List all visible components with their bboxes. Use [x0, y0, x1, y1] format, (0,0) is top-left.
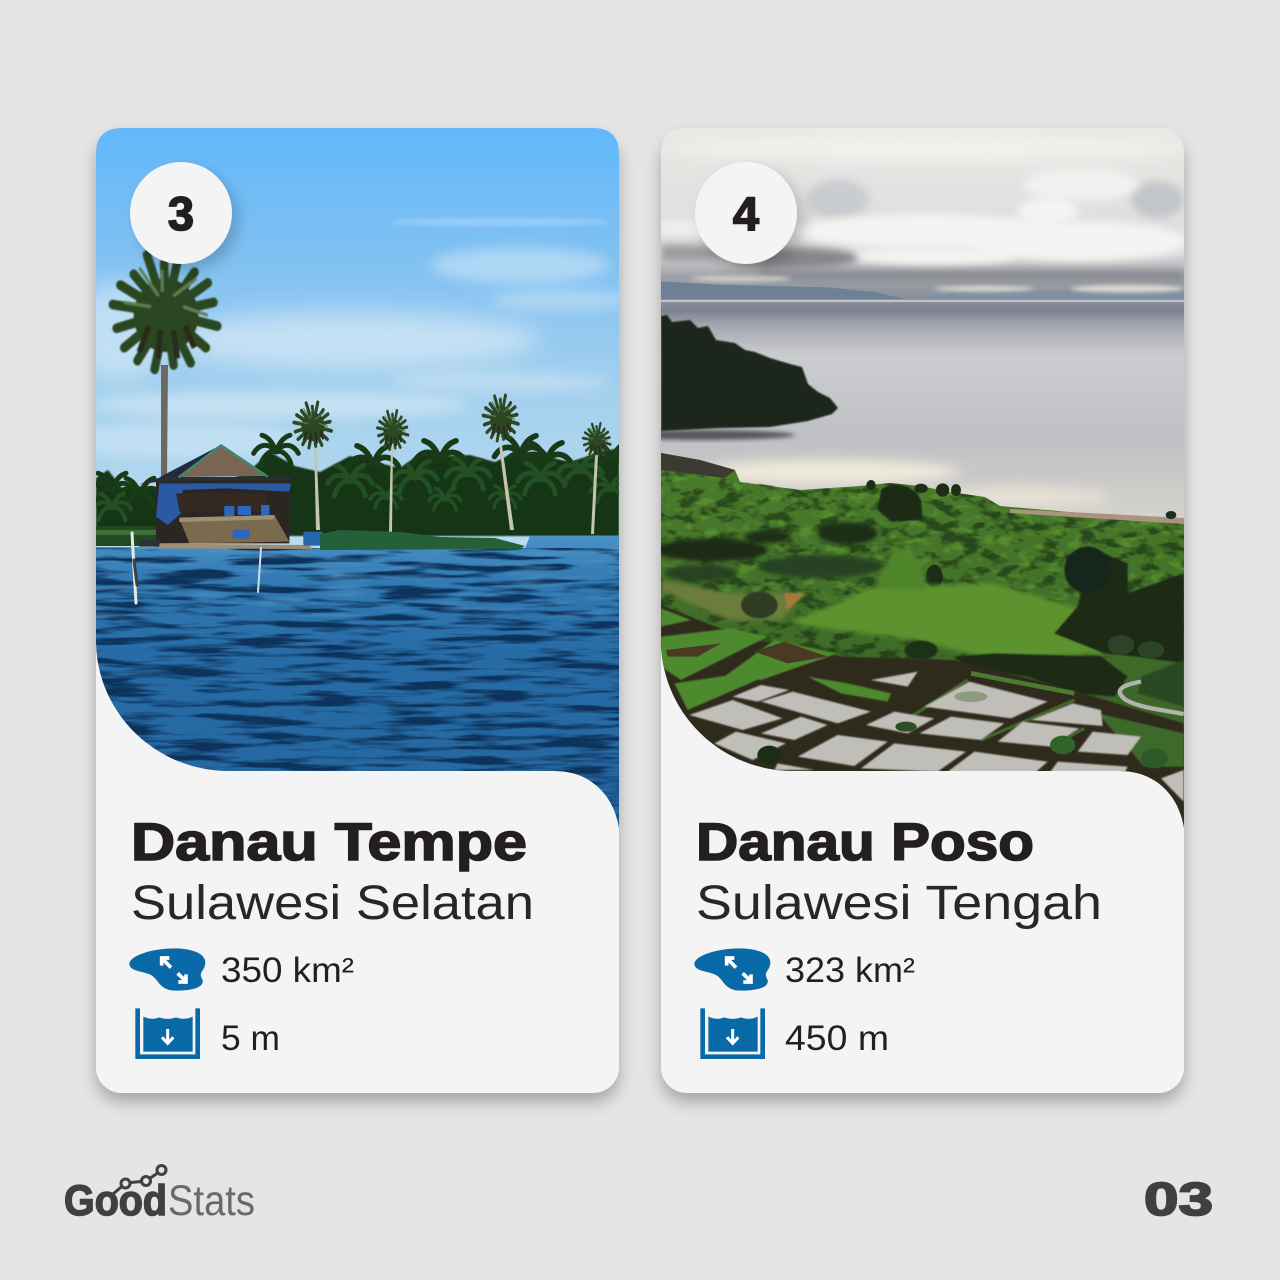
icon: lake depth: [703, 1008, 763, 1057]
card 3 base: [96, 128, 619, 1093]
photo: Danau Tempe: [60, 128, 634, 830]
icon: lake depth: [138, 1008, 198, 1057]
value: depth: 5 m: [221, 1019, 280, 1058]
number badge 4: 4: [733, 187, 759, 240]
water hyacinth island: [320, 530, 525, 550]
heading: Danau Poso: Danau Poso: [696, 813, 1034, 872]
panel: card 3 Danau Tempe: [60, 128, 634, 1093]
water: [96, 536, 619, 830]
subheading: Sulawesi Tengah: Sulawesi Tengah: [696, 877, 1102, 930]
page number: 03: [1144, 1173, 1213, 1225]
number badge 4: [695, 162, 797, 264]
number badge 3: [130, 162, 232, 264]
panel: card 4 Danau Poso: [605, 128, 1194, 1093]
photo: Danau Poso: [661, 128, 1184, 828]
logo: GoodStats: Good: [64, 1177, 167, 1225]
value: area: 350 km²: [221, 951, 354, 990]
card 4 base: [661, 128, 1184, 1093]
icon: lake area: [129, 948, 205, 991]
floating house: [139, 445, 323, 549]
value: depth: 450 m: [785, 1019, 889, 1058]
icon: lake area: [694, 948, 770, 991]
land: [661, 453, 1184, 830]
flooded paddies: [689, 672, 1184, 802]
logo: GoodStats: Stats: [168, 1177, 255, 1225]
value: area: 323 km²: [785, 951, 915, 990]
number badge 3: 3: [168, 187, 194, 240]
trees and fields: [654, 480, 1184, 833]
heading: Danau Tempe: Danau Tempe: [131, 813, 527, 872]
bamboo poles: [132, 533, 261, 603]
paddy ground: [661, 605, 1184, 833]
palm trees: [113, 253, 611, 534]
headland: [661, 315, 838, 431]
tree line: [90, 435, 634, 546]
subheading: Sulawesi Selatan: Sulawesi Selatan: [131, 877, 534, 930]
logo: GoodStats: [64, 1166, 255, 1225]
